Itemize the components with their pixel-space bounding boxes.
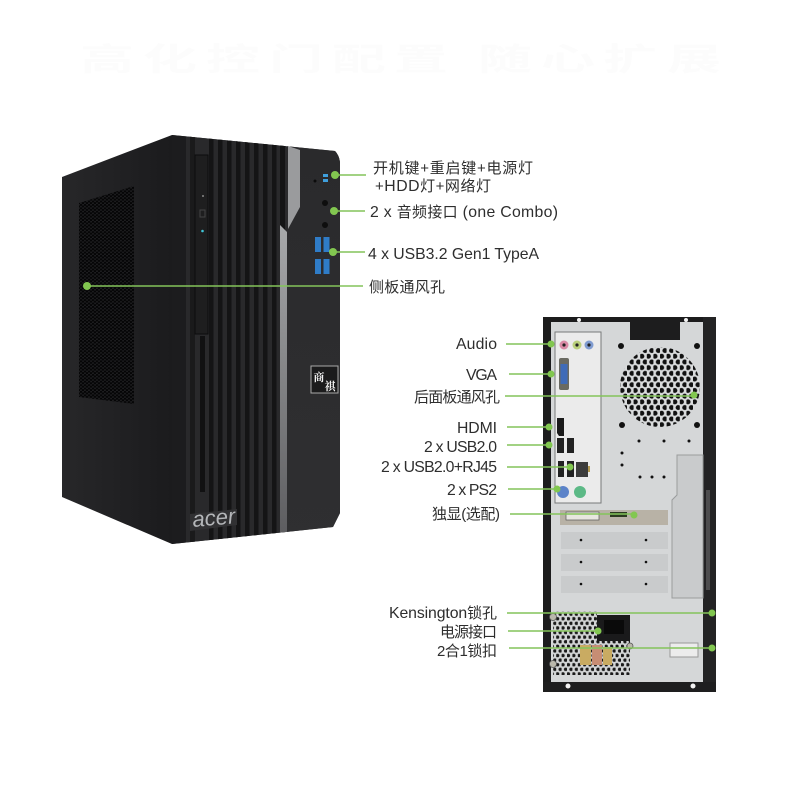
expansion slot covers (561, 532, 668, 593)
faint ghost title: 展 (667, 34, 721, 79)
badge: 商祺: 祺 (324, 379, 336, 393)
faint ghost title: 扩 (603, 34, 657, 79)
badge: 商祺 (311, 366, 338, 393)
callout: USB 2.0 (424, 439, 552, 456)
faint ghost title: 心 (541, 34, 595, 79)
power button and LEDs (314, 174, 328, 182)
PSU screws (550, 614, 633, 668)
USB 2.0 ports (557, 438, 574, 453)
PS2 ports (557, 486, 586, 498)
tower side panel (62, 135, 172, 544)
tower front fascia with ribs (172, 130, 342, 550)
callout: VGA (466, 367, 554, 384)
callout: 2-in-1 lock: 2合1锁扣 (437, 643, 497, 660)
callout: PS2: 2 x PS2 (447, 482, 497, 499)
rear silver back plate (551, 322, 703, 682)
front USB ports (315, 237, 330, 274)
callout: side vent: 侧板通风孔 (369, 278, 445, 296)
slot screws (580, 539, 647, 585)
drive indicators (200, 195, 205, 232)
USB 2.0 and RJ45 ports (558, 461, 590, 477)
expansion retention bracket (672, 455, 703, 598)
acer logo: acer (191, 503, 238, 532)
callout: power connector (440, 624, 602, 641)
rear view of the chassis (543, 317, 716, 692)
faint ghost title: 高 (80, 34, 134, 79)
top handle (630, 320, 680, 340)
callout: USB 2.0: 2 x USB2.0 (424, 439, 497, 456)
callout: power and reset buttons: +HDD灯+网络灯 (375, 178, 491, 195)
graphics card bracket (560, 510, 668, 525)
callout: power and reset buttons: 开机键+重启键+电源灯 (373, 160, 533, 177)
callout: USB 2.0 and RJ45: 2 x USB2.0+RJ45 (381, 459, 497, 476)
fan grille (620, 347, 700, 427)
right black side strip (703, 317, 716, 692)
VGA port (559, 358, 569, 390)
callout: discrete graphics (432, 506, 638, 523)
side ventilation mesh (79, 186, 134, 404)
2-in-1 lock tab (670, 643, 698, 657)
callout: audio jacks: 2 x 音频接口 (one Combo) (370, 204, 558, 221)
callout: HDMI (457, 420, 552, 437)
faint ghost title: 配 (332, 34, 386, 79)
PSU grille (553, 611, 597, 675)
faint ghost title (80, 34, 721, 79)
silver lower strip (280, 225, 287, 550)
silver upper accent (288, 146, 300, 229)
callout: side vent (83, 278, 445, 296)
right control panel (287, 146, 340, 532)
callout: HDMI: HDMI (457, 420, 497, 437)
faint ghost title: 随 (478, 34, 532, 79)
rear outer black frame (543, 317, 716, 692)
callout: 2-in-1 lock (437, 643, 716, 660)
callout: power and reset buttons (331, 160, 533, 195)
badge: 商祺: 商 (314, 371, 324, 384)
front audio jacks (322, 200, 328, 228)
faint ghost title: 控 (206, 34, 260, 79)
callout: power connector: 电源接口 (440, 624, 497, 641)
bottom black bar (543, 318, 716, 692)
callout: VGA: VGA (466, 367, 497, 384)
PSU warning labels (580, 645, 612, 665)
faint ghost title: 置 (394, 34, 448, 79)
callout: rear vent (414, 388, 698, 406)
callout: discrete graphics: 独显(选配) (432, 506, 500, 523)
power socket (597, 615, 630, 641)
rear mounting holes (618, 343, 700, 478)
callout: Kensington lock: Kensington锁孔 (389, 605, 497, 622)
I/O shield (555, 332, 601, 503)
callout: Audio (456, 336, 554, 353)
inner black slit (706, 490, 710, 590)
callout: Audio: Audio (456, 336, 497, 353)
callout: rear vent: 后面板通风孔 (414, 388, 500, 406)
lower drive slot (200, 336, 205, 492)
faint ghost title: 化 (143, 34, 197, 79)
callout: Kensington lock (389, 605, 716, 622)
audio jacks (560, 340, 594, 350)
HDMI port (557, 418, 564, 436)
callout: USB 2.0 and RJ45 (381, 459, 574, 476)
faint ghost title: 门 (269, 34, 323, 79)
callout: front USB: 4 x USB3.2 Gen1 TypeA (368, 246, 539, 263)
callout: PS2 (447, 482, 560, 499)
optical drive bay (195, 155, 208, 334)
front-angle desktop tower photo (62, 130, 342, 550)
